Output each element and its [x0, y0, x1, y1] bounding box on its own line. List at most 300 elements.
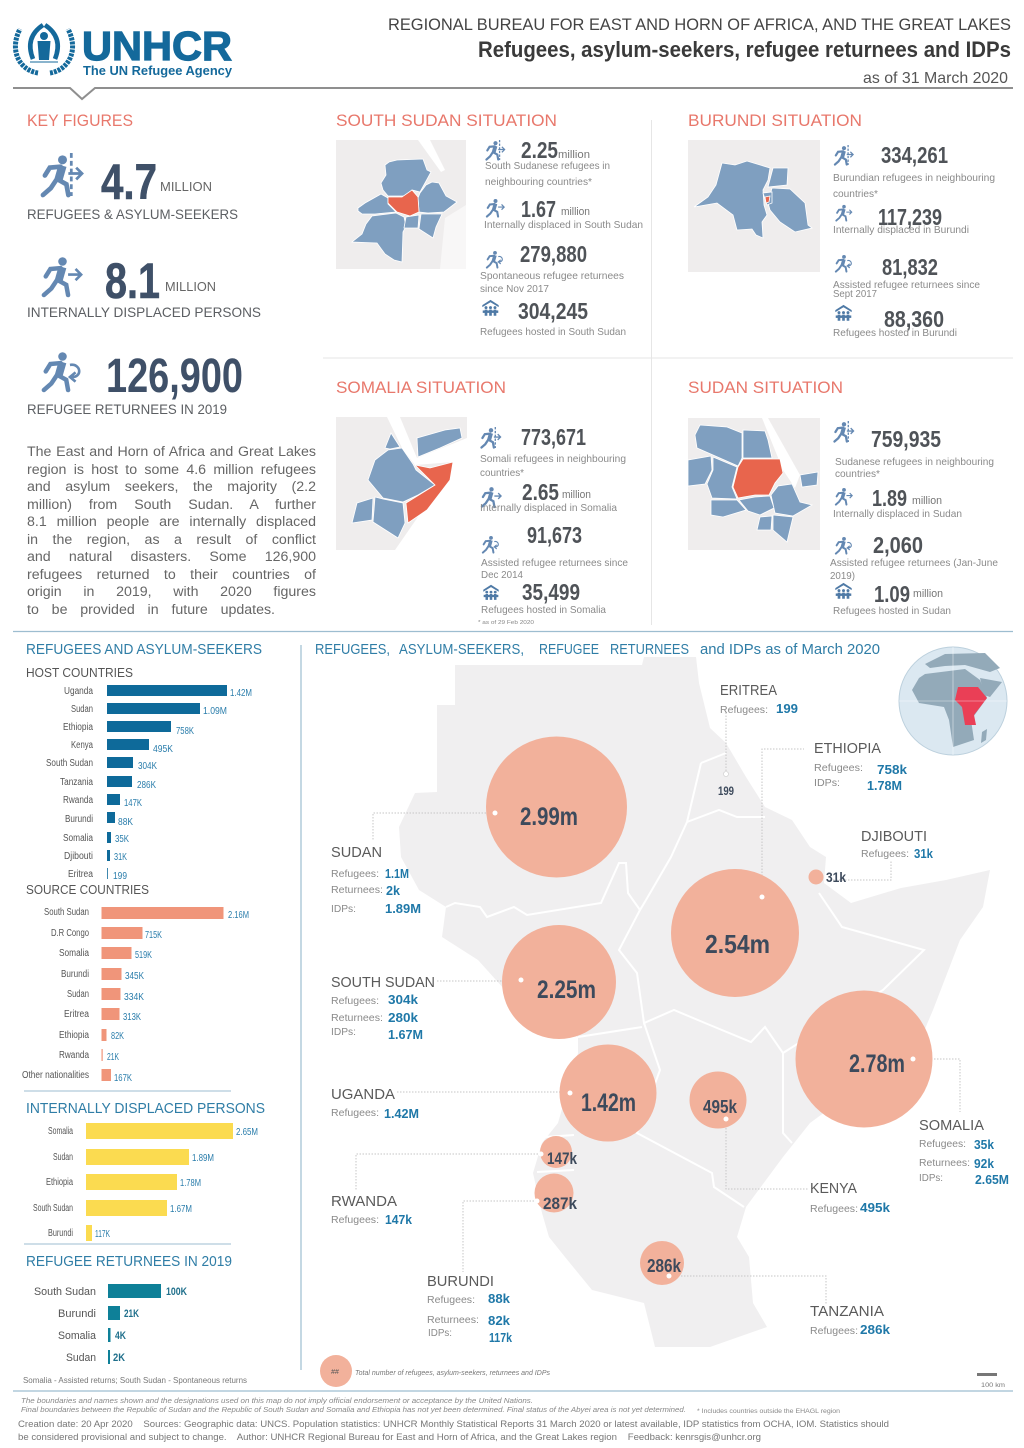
footer [18, 1398, 889, 1443]
panel: Sudan situation [688, 378, 998, 617]
country label: South Sudan: SOUTH SUDAN [331, 974, 435, 991]
bar chart: host countries: Kenya [71, 740, 93, 751]
country label: Eritrea: ERITREA [720, 682, 777, 699]
country label: Djibouti: DJIBOUTI [861, 828, 927, 845]
stat: refugees hosted: 1.09 [874, 581, 910, 607]
summary paragraph: region is host to some 4.6 million refugees [27, 462, 316, 478]
country label: Kenya [810, 1180, 890, 1215]
icon: IDPs [836, 205, 852, 221]
stat: assisted returnees: Assisted refugee returnees since [481, 557, 628, 569]
country label: South Sudan: 1.67M [388, 1028, 423, 1042]
bar chart: source countries: 2.16M [228, 910, 249, 921]
bar chart: host countries: Burundi [65, 814, 93, 825]
bar chart: source countries: 21K [107, 1052, 119, 1063]
heading: KEY FIGURES [27, 111, 133, 130]
country label: Sudan: IDPs: [331, 903, 356, 915]
stat: spontaneous returnees: 279,880 [520, 241, 587, 267]
stat: internally displaced: Internally displaced in Burundi [833, 224, 969, 236]
date: as of 31 March 2020 [863, 70, 1008, 87]
country label: Ethiopia: Refugees: [814, 762, 863, 774]
circle: Djibouti [808, 869, 846, 885]
stat: Sudanese refugees: 759,935 [871, 426, 941, 452]
figure: refugees and asylum-seekers: MILLION [160, 179, 212, 194]
locator map: Somalia [336, 417, 467, 550]
country label: Uganda [331, 1086, 419, 1121]
circle: South Sudan [502, 925, 616, 1039]
summary paragraph: 8.1 million people are internally displaced [27, 514, 316, 530]
country label: South Sudan: Refugees: [331, 995, 379, 1007]
bar chart: source countries: 715K [145, 930, 162, 941]
bar chart: returnees: Somalia [58, 1330, 97, 1342]
stat: Burundian refugees: countries* [833, 188, 878, 200]
bar chart: source countries: Burundi [61, 969, 89, 980]
bar chart: returnees: 21K [124, 1308, 139, 1320]
locator map: Sudan [688, 418, 820, 550]
country label: Kenya: KENYA [810, 1180, 857, 1197]
bar chart: host countries: 199 [113, 871, 127, 882]
bar chart: IDPs: 1.89M [192, 1153, 214, 1164]
stat: refugees hosted: Refugees hosted in Sudan [833, 605, 951, 617]
region note: * Includes countries outside the EHAGL region [697, 1409, 840, 1415]
bar chart: returnees: Burundi [58, 1308, 96, 1320]
circle: Burundi [534, 1174, 577, 1213]
country label: Sudan: 1.1M [385, 867, 409, 881]
stat: internally displaced: Internally displaced in South Sudan [484, 219, 643, 231]
summary paragraph: The East and Horn of Africa and Great Lakes [27, 444, 316, 460]
bar chart: IDPs: South Sudan [33, 1203, 73, 1214]
icon: shelter [835, 305, 852, 321]
country label: Somalia: 2.65M [975, 1173, 1009, 1187]
stat: Sudanese refugees [834, 421, 994, 480]
country label: Djibouti: Refugees: [861, 848, 909, 860]
bar chart: source countries [22, 907, 249, 1084]
map title: REFUGEE [539, 641, 599, 658]
dividers [323, 120, 1013, 625]
country label: Kenya: Refugees: [810, 1203, 858, 1215]
country label: Sudan: Refugees: [331, 868, 379, 880]
country label: Burundi: 88k [488, 1292, 510, 1306]
header rule with notch [13, 88, 1013, 99]
circle: Somalia: 2.78m [849, 1050, 905, 1078]
bar chart: IDPs: Ethiopia [46, 1177, 73, 1188]
stat: internally displaced: million [912, 495, 942, 507]
stat: internally displaced: million [561, 206, 590, 218]
icon: UNHCR wreath emblem [15, 25, 73, 73]
heading: INTERNALLY DISPLACED PERSONS [26, 1100, 265, 1117]
icon: shelter [482, 300, 499, 316]
heading: REFUGEE RETURNEES IN 2019 [26, 1253, 232, 1270]
bar chart: source countries: Somalia [59, 948, 89, 959]
country label: Somalia: 35k [974, 1138, 994, 1152]
country label: Tanzania: 286k [860, 1323, 890, 1337]
country label: Burundi: IDPs: [428, 1327, 452, 1339]
country label: Ethiopia: IDPs: [814, 777, 840, 789]
country label: South Sudan: 280k [388, 1011, 418, 1025]
stat: refugees hosted: million [913, 588, 943, 600]
bar chart: returnees: 4K [115, 1330, 126, 1342]
header: logo [15, 23, 233, 78]
heading: REFUGEES AND ASYLUM-SEEKERS [26, 641, 262, 658]
icon: refugees [834, 421, 854, 442]
figure: internally displaced persons [27, 253, 261, 320]
country label: Burundi [427, 1273, 512, 1345]
panel: Burundi situation [688, 111, 995, 339]
heading: BURUNDI SITUATION [688, 111, 862, 130]
icon: refugees [481, 427, 501, 448]
stat: internally displaced [480, 479, 617, 514]
country label: Djibouti: 31k [914, 847, 933, 861]
stat: internally displaced [833, 204, 969, 236]
figure: internally displaced persons: MILLION [165, 279, 216, 294]
scale bar [977, 1373, 1005, 1389]
country label: Burundi: Refugees: [427, 1294, 475, 1306]
country label: Ethiopia: ETHIOPIA [814, 740, 881, 757]
stat: spontaneous returnees: since Nov 2017 [480, 283, 549, 295]
icon: returnees [836, 255, 851, 272]
bar chart: source countries: Sudan [67, 989, 89, 1000]
country label: Burundi: 82k [488, 1314, 510, 1328]
stat: internally displaced: Internally displaced in Somalia [480, 502, 617, 514]
stat: South Sudanese refugees [485, 137, 610, 188]
country label: Sudan: 2k [386, 884, 400, 898]
summary paragraph [27, 444, 316, 624]
figure: refugee returnees: 126,900 [106, 350, 243, 403]
country label: Somalia: 92k [974, 1157, 994, 1171]
bar chart: host countries: 88K [118, 817, 133, 828]
bar chart: IDPs: Sudan [53, 1152, 73, 1163]
stat: spontaneous returnees: Spontaneous refugee returnees [480, 270, 624, 282]
icon: person with arrow [44, 257, 81, 295]
bar chart: returnees: 100K [166, 1286, 187, 1298]
stat: South Sudanese refugees: South Sudanese refugees in [485, 160, 610, 172]
bar chart: host countries: Djibouti [64, 851, 93, 862]
circle: Ethiopia [671, 869, 799, 997]
bar chart: IDPs [33, 1123, 258, 1241]
country label: Burundi: Returnees: [427, 1314, 479, 1326]
country label: Tanzania [810, 1303, 890, 1337]
country label: Uganda: UGANDA [331, 1086, 395, 1103]
circle: Kenya: 495k [703, 1097, 738, 1117]
figure: refugees and asylum-seekers: 4.7 [101, 154, 157, 210]
country label: South Sudan: IDPs: [331, 1026, 356, 1038]
country label: Kenya: 495k [860, 1201, 890, 1215]
map title: ASYLUM-SEEKERS, [399, 641, 524, 658]
summary paragraph: and natural disasters. Some 126,900 [27, 549, 316, 565]
bar chart: IDPs: 117K [95, 1229, 110, 1240]
icon: returnees [836, 537, 851, 554]
country label: Somalia: IDPs: [919, 1172, 943, 1184]
bar chart: host countries: 1.09M [203, 706, 227, 717]
stat: assisted returnees: 2019) [830, 570, 855, 582]
stat: Somali refugees: 773,671 [521, 424, 586, 450]
stat: spontaneous returnees [480, 241, 624, 295]
bar chart: IDPs: 1.78M [180, 1178, 201, 1189]
stat: assisted returnees: 91,673 [527, 522, 582, 548]
stat: internally displaced [833, 485, 962, 520]
country label: Ethiopia [814, 740, 907, 793]
stat: Sudanese refugees: Sudanese refugees in neighbouring [835, 456, 994, 468]
stat: assisted returnees [830, 532, 998, 582]
summary paragraph: and asylum seekers, the majority (2.2 [27, 479, 316, 495]
stat: Somali refugees [480, 424, 626, 479]
marker: Eritrea [718, 772, 734, 798]
chart note: Somalia - Assisted returns; South Sudan - Spontaneous returns [23, 1376, 247, 1385]
country label: Rwanda: Refugees: [331, 1214, 379, 1226]
credits line 1: Creation date: 20 Apr 2020 Sources: Geographic data: UNCS. Population statistics: UNHCR Monthly Statistical Reports 31 March 2020 or latest available, IDP statistics from OCHA, IOM. Statistics should [18, 1419, 889, 1430]
locator map: South Sudan [336, 140, 466, 269]
disclaimer: The boundaries and names shown and the designations used on this map do not imply official endorsement or acceptance by the United Nations. [21, 1398, 533, 1405]
circle: Ethiopia: 2.54m [705, 929, 770, 959]
country label: Sudan: Returnees: [331, 884, 383, 896]
bar chart: returnees: 2K [113, 1352, 125, 1364]
stat: internally displaced [484, 196, 643, 231]
country label: South Sudan: Returnees: [331, 1012, 383, 1024]
stat: internally displaced: 117,239 [878, 204, 942, 230]
stat: assisted returnees: 2,060 [873, 532, 923, 558]
icon: person crossing border [43, 153, 82, 196]
country label: Uganda: Refugees: [331, 1107, 379, 1119]
stat: Burundian refugees: Burundian refugees in neighbouring [833, 172, 995, 184]
circle: Tanzania: 286k [647, 1256, 682, 1276]
logo tagline: The UN Refugee Agency [83, 63, 233, 78]
summary paragraph: origin in 2019, with 2020 figures [27, 584, 316, 600]
circle: Somalia [796, 990, 932, 1128]
stat: refugees hosted [833, 581, 951, 617]
bar chart: host countries: Uganda [64, 686, 93, 697]
bar chart: source countries: South Sudan [44, 907, 89, 918]
country label: Sudan [331, 844, 421, 916]
bar chart: host countries: Somalia [63, 833, 93, 844]
country label: Tanzania: TANZANIA [810, 1303, 884, 1320]
locator map: Burundi [688, 140, 820, 272]
bar chart: host countries: Ethiopia [63, 722, 93, 733]
bar chart: host countries: 758K [176, 726, 194, 737]
stat: refugees hosted: Refugees hosted in Burundi [833, 327, 957, 339]
bar chart: source countries: 313K [123, 1012, 141, 1023]
circle: Uganda: 1.42m [581, 1089, 636, 1117]
stat: assisted returnees [481, 522, 628, 581]
map legend: Total number of refugees, asylum-seekers, returnees and IDPs [355, 1370, 550, 1377]
bar chart: source countries: D.R Congo [51, 928, 89, 939]
country label: Somalia: Refugees: [919, 1138, 966, 1150]
bar chart: host countries: 31K [114, 852, 127, 863]
stat: internally displaced: 2.65 [522, 479, 559, 505]
stat: assisted returnees [833, 254, 980, 300]
stat: refugees hosted: Refugees hosted in South Sudan [480, 326, 626, 338]
icon: IDPs [487, 199, 504, 217]
stat: South Sudanese refugees: neighbouring countries* [485, 176, 592, 188]
country label: Somalia: Returnees: [919, 1157, 970, 1169]
country label: Ethiopia: 758k [877, 763, 907, 777]
bar chart: host countries: 35K [115, 834, 129, 845]
icon: returnees [487, 251, 502, 268]
header: title block [388, 15, 1011, 87]
figure: refugee returnees: REFUGEE RETURNEES IN 2019 [27, 401, 227, 417]
bar chart: host countries [46, 685, 252, 882]
bar chart: IDPs: 2.65M [236, 1127, 258, 1138]
bar chart: source countries: 345K [125, 971, 144, 982]
boundary note: Final boundaries between the Republic of Sudan and the Republic of South Sudan and Somalia and Ethiopia has not yet been determined. Final status of the Abyei area is not yet determined. [21, 1407, 686, 1414]
country label: Rwanda: RWANDA [331, 1193, 397, 1210]
country label: South Sudan [331, 974, 435, 1042]
icon: returnees [483, 536, 498, 553]
map title: and IDPs as of March 2020 [700, 641, 880, 658]
circle: Rwanda: 147k [547, 1149, 577, 1168]
stat: internally displaced: 1.67 [521, 196, 556, 222]
bar chart: source countries: 519K [135, 950, 152, 961]
figure: refugee returnees [27, 350, 243, 417]
stat: internally displaced: million [562, 489, 591, 501]
figure: refugees and asylum-seekers: REFUGEES & ASYLUM-SEEKERS [27, 206, 238, 222]
map title [315, 641, 880, 658]
icon: refugees [486, 140, 505, 160]
country label: Rwanda [331, 1193, 412, 1227]
subheading: host countries: HOST COUNTRIES [26, 665, 133, 680]
country label: Djibouti [861, 828, 933, 861]
country label: Eritrea: Refugees: [720, 704, 768, 716]
stat: assisted returnees: Dec 2014 [481, 569, 523, 581]
regional map [399, 657, 990, 1347]
icon: refugees [835, 145, 853, 165]
stat: Somali refugees: Somali refugees in neighbouring [480, 453, 626, 465]
bar chart: host countries: South Sudan [46, 758, 93, 769]
bar chart: host countries: 304K [138, 761, 157, 772]
panel: South Sudan situation [336, 111, 643, 338]
icon: shelter [483, 585, 499, 600]
heading: SUDAN SITUATION [688, 378, 843, 397]
country label: Eritrea [720, 682, 798, 716]
country label: Tanzania: Refugees: [810, 1325, 858, 1337]
stat: South Sudanese refugees: 2.25 [521, 137, 558, 163]
logo wordmark: UNHCR [82, 23, 232, 69]
stat: assisted returnees: Assisted refugee returnees since [833, 279, 980, 291]
map title: RETURNEES [610, 641, 689, 658]
map legend: ## [331, 1369, 339, 1376]
stat: internally displaced: Internally displaced in Sudan [833, 508, 962, 520]
bar chart: source countries: 334K [124, 992, 144, 1003]
proportional circles [486, 736, 932, 1285]
stat: Sudanese refugees: countries* [835, 468, 880, 480]
bar chart: IDPs: Somalia [48, 1126, 73, 1137]
summary paragraph: refugees returned to their countries of [27, 567, 316, 583]
stat: Burundian refugees: 334,261 [881, 142, 948, 168]
footnote: * as of 29 Feb 2020 [478, 620, 534, 626]
bar chart: returnees: Sudan [66, 1352, 96, 1364]
country label: Uganda: 1.42M [384, 1107, 419, 1121]
marker: Eritrea: 199 [718, 784, 734, 798]
bar chart: returnees: South Sudan [34, 1286, 96, 1298]
bar chart: host countries: 495K [153, 744, 173, 755]
stat: Somali refugees: countries* [480, 467, 524, 479]
figure: internally displaced persons: INTERNALLY DISPLACED PERSONS [27, 304, 261, 320]
figure: refugees and asylum-seekers [27, 153, 238, 222]
stat: Burundian refugees [833, 142, 995, 200]
bar chart: host countries: 1.42M [230, 688, 252, 699]
bar chart: source countries: 82K [111, 1031, 124, 1042]
icon: shelter [835, 583, 852, 599]
stat: assisted returnees: Sept 2017 [833, 288, 877, 300]
circle: Djibouti: 31k [826, 869, 846, 885]
circle: Uganda [560, 1044, 656, 1142]
country label: Rwanda: 147k [385, 1213, 412, 1227]
country label: Burundi: BURUNDI [427, 1273, 494, 1290]
country label: Sudan: SUDAN [331, 844, 382, 861]
icon: IDPs [836, 488, 852, 505]
figure: internally displaced persons: 8.1 [105, 253, 160, 309]
heading: SOMALIA SITUATION [336, 378, 506, 397]
stat: refugees hosted [833, 305, 957, 339]
map legend [320, 1355, 550, 1387]
subheading: source countries: SOURCE COUNTRIES [26, 882, 149, 897]
credits line 2: be considered provisional and subject to change. Author: UNHCR Regional Bureau for East and Horn of Africa, and the Great Lakes region Feedback: kenrsgis@unhcr.org [18, 1432, 761, 1443]
stat: internally displaced: 1.89 [872, 485, 907, 511]
summary paragraph: in the region, as a result of conflict [27, 532, 316, 548]
country label: South Sudan: 304k [388, 993, 418, 1007]
circle: Sudan [486, 736, 627, 878]
scale bar: 100 km [981, 1383, 1005, 1389]
panel: refugee returnees chart [23, 1253, 247, 1385]
summary paragraph: to be provided in future updates. [27, 602, 275, 618]
icon: person returning [44, 352, 79, 390]
bureau line: REGIONAL BUREAU FOR EAST AND HORN OF AFRICA, AND THE GREAT LAKES [388, 15, 1011, 34]
stat: refugees hosted [481, 579, 606, 616]
map title: REFUGEES, [315, 641, 390, 658]
country label: Sudan: 1.89M [385, 902, 421, 916]
country label: Eritrea: 199 [776, 702, 798, 716]
bar chart: host countries: 286K [137, 780, 156, 791]
bar chart: host countries: Tanzania [60, 777, 93, 788]
circle: Burundi: 287k [543, 1194, 577, 1213]
circle: Kenya [690, 1072, 746, 1128]
summary paragraph: million) from South Sudan. A further [27, 497, 316, 513]
stat: assisted returnees: 81,832 [882, 254, 938, 280]
panel: Somalia situation [336, 378, 628, 626]
land mass [399, 657, 990, 1347]
panel: internally displaced persons chart [26, 1100, 265, 1241]
bar chart: host countries: Eritrea [68, 869, 93, 880]
dotted leader lines [356, 712, 960, 1305]
country label: Somalia: SOMALIA [919, 1117, 984, 1134]
circle: South Sudan: 2.25m [537, 976, 596, 1004]
country borders [446, 753, 924, 1207]
panel: refugees and asylum-seekers charts [22, 641, 262, 1084]
stat: refugees hosted [480, 298, 626, 338]
bar chart: IDPs: Burundi [48, 1228, 73, 1239]
panel: key figures [27, 111, 316, 624]
circle: Rwanda [538, 1136, 577, 1168]
bar chart: source countries: Ethiopia [59, 1030, 89, 1041]
bar chart: source countries: Rwanda [59, 1050, 89, 1061]
circle: Sudan: 2.99m [520, 803, 578, 831]
icon: IDPs [482, 487, 501, 507]
bar chart: source countries: Eritrea [64, 1009, 89, 1020]
stat: refugees hosted: 304,245 [518, 298, 588, 324]
stat: South Sudanese refugees: million [558, 149, 590, 161]
bar chart: host countries: 147K [124, 798, 142, 809]
inset globe [899, 647, 1007, 755]
stat: assisted returnees: Assisted refugee returnees (Jan-June [830, 557, 998, 569]
bar chart: source countries: 167K [114, 1073, 132, 1084]
circle: Tanzania [640, 1241, 684, 1285]
stat: refugees hosted: 88,360 [884, 306, 944, 332]
bar chart: source countries: Other nationalities [22, 1070, 89, 1081]
bar chart: host countries: Rwanda [63, 795, 93, 806]
section rules [13, 632, 1013, 1391]
country label: Ethiopia: 1.78M [867, 779, 902, 793]
heading: SOUTH SUDAN SITUATION [336, 111, 557, 130]
bar chart: host countries: Sudan [71, 704, 93, 715]
stat: refugees hosted: Refugees hosted in Somalia [481, 604, 606, 616]
